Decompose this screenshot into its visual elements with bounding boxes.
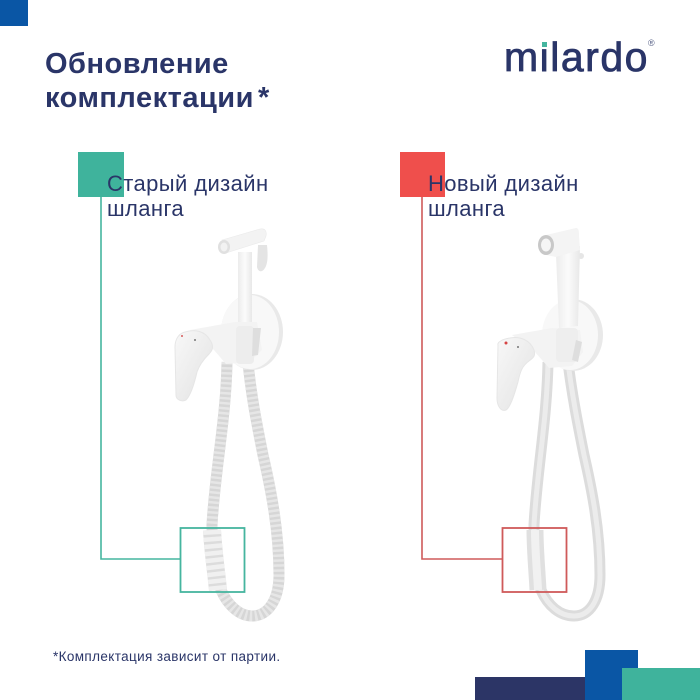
old design marker square [78,152,124,197]
old design label: шланга [107,196,184,221]
old design label: Старый дизайн [107,171,268,196]
new design label: шланга [428,196,505,221]
logo: milardo: ® [648,38,655,48]
title [45,48,270,114]
corner accent: top left [0,0,28,26]
new design leader line and callout box [422,197,566,592]
logo: milardo: milardo [504,34,649,80]
footnote: *Комплектация зависит от партии. [53,649,281,664]
title: Обновление [45,48,229,80]
old design leader line and callout box [101,197,244,592]
title: комплектации* [45,82,270,114]
old design faucet [175,229,283,401]
corner accent: bottom teal block [622,668,700,700]
new design faucet [497,228,603,410]
new design hose [534,362,600,616]
old design label [107,171,268,221]
corner accent: bottom navy block [475,677,585,700]
old design hose [212,362,279,616]
new design marker square [400,152,445,197]
new design label [428,171,579,221]
corner accent: bottom blue block [585,650,638,700]
new design label: Новый дизайн [428,171,579,196]
